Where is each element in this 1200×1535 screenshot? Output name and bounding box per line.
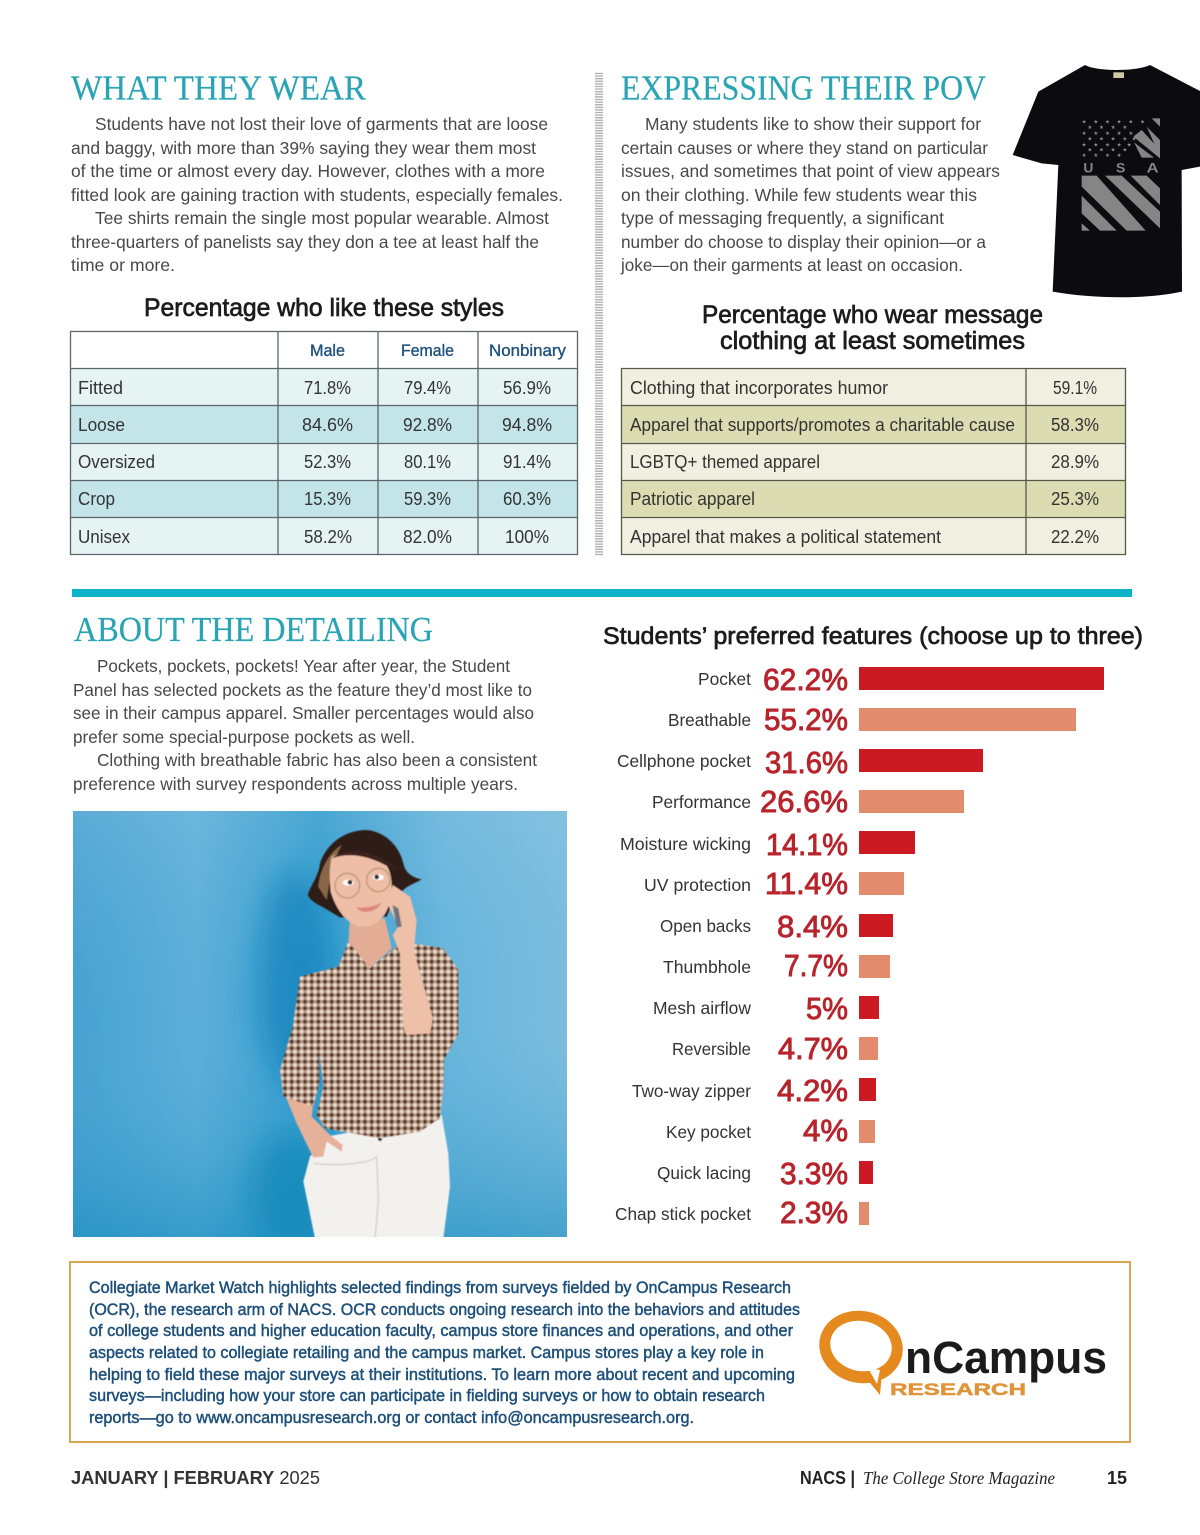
callout text: surveys—including how your store can participate in fielding surveys or how to obtain research — [89, 1387, 765, 1405]
icon: t-shirt with USA flag print: A — [1147, 159, 1159, 175]
chart row: two-way zipper: Two-way zipper — [632, 1081, 751, 1101]
text block: expressing their pov: Many students like to show their support for — [645, 114, 981, 134]
table: styles — [70, 331, 578, 555]
chart row: cellphone pocket: Cellphone pocket — [617, 751, 751, 771]
chart row: pocket: Pocket — [698, 669, 751, 689]
callout text: of college students and higher education faculty, campus store finances and operations, and other — [89, 1322, 793, 1340]
chart row: open backs: 8.4% — [777, 909, 848, 944]
chart row: moisture wicking: Moisture wicking — [620, 834, 751, 854]
chart row: reversible — [672, 1031, 878, 1066]
chart row: breathable: Breathable — [668, 710, 751, 730]
text block: expressing their pov: type of messaging frequently, a significant — [621, 208, 944, 228]
chart row: performance — [652, 784, 964, 819]
chart row: key pocket — [666, 1113, 875, 1148]
footer: publication name: NACS | — [800, 1468, 855, 1488]
icon: t-shirt with USA flag print: U — [1083, 159, 1093, 175]
chart row: breathable: 55.2% — [764, 702, 848, 737]
table: styles: Fitted — [78, 378, 123, 398]
text block: what they wear: and baggy, with more than 39% saying they wear them most — [71, 138, 536, 158]
text block: expressing their pov: number do choose to display their opinion—or a — [621, 232, 986, 252]
table: styles: 84.6% — [302, 415, 353, 435]
footer: issue date: JANUARY | FEBRUARY 2025 — [71, 1468, 320, 1488]
text block: what they wear: Tee shirts remain the single most popular wearable. Almost — [95, 208, 549, 228]
table: styles: Unisex — [78, 527, 130, 547]
icon: t-shirt with USA flag print: ★★★★ — [1087, 125, 1127, 131]
table: message clothing: 59.1% — [1053, 378, 1097, 398]
chart row: uv protection — [644, 866, 904, 901]
teal section rule — [72, 589, 1132, 597]
icon: t-shirt with USA flag print: ★★★★★ — [1082, 142, 1132, 148]
table: styles: Crop — [78, 489, 115, 509]
text block: what they wear: three-quarters of panelists say they don a tee at least half the — [71, 232, 539, 252]
table: message clothing: 28.9% — [1051, 452, 1099, 472]
table: message clothing: Apparel that supports/promotes a charitable cause — [630, 415, 1015, 435]
chart row: open backs: Open backs — [660, 916, 751, 936]
text block: what they wear — [71, 114, 563, 275]
chart row: mesh airflow: Mesh airflow — [653, 998, 751, 1018]
chart row: thumbhole: 7.7% — [784, 948, 848, 983]
face — [330, 852, 392, 927]
shirt body — [280, 942, 458, 1138]
table: styles: 100% — [505, 527, 549, 547]
callout text: helping to field these major surveys at their institutions. To learn more about recent and upcoming — [89, 1366, 795, 1384]
callout: about OnCampus Research — [70, 1262, 1130, 1442]
icon: t-shirt with USA flag print — [1013, 65, 1200, 297]
raised forearm and hand — [387, 885, 433, 1047]
icon: t-shirt with USA flag print: ★★★★★★ — [1082, 120, 1145, 126]
glasses — [335, 868, 390, 898]
icon: t-shirt with USA flag print: S — [1116, 159, 1125, 175]
text block: expressing their pov: on their clothing. While few students wear this — [621, 185, 977, 205]
text block: about the detailing: Panel has selected pockets as the feature they’d most like to — [73, 680, 532, 700]
heading: percentage who wear message clothing — [702, 301, 1043, 355]
chart row: chap stick pocket — [615, 1195, 869, 1230]
table: styles: 52.3% — [304, 452, 351, 472]
chart row: thumbhole: Thumbhole — [663, 957, 751, 977]
table: styles: 92.8% — [403, 415, 452, 435]
table: message clothing: LGBTQ+ themed apparel — [630, 452, 820, 472]
callout text: aspects related to collegiate retailing and the campus market. Campus stores play a key role in — [89, 1344, 764, 1362]
text block: what they wear: Students have not lost their love of garments that are loose — [95, 114, 548, 134]
chart row: reversible: Reversible — [672, 1039, 751, 1059]
chart row: uv protection: UV protection — [644, 875, 751, 895]
table: styles: Female — [401, 341, 454, 360]
text block: expressing their pov: issues, and sometimes that point of view appears — [621, 161, 1000, 181]
table: styles: 71.8% — [304, 378, 351, 398]
heading: percentage who wear message clothing: clothing at least sometimes — [720, 327, 1025, 355]
chart row: open backs — [660, 909, 893, 944]
table: message clothing: 25.3% — [1051, 489, 1099, 509]
chart row: two-way zipper: 4.2% — [777, 1073, 848, 1108]
table: styles: 80.1% — [404, 452, 451, 472]
chart row: quick lacing — [657, 1156, 873, 1191]
table: styles: 94.8% — [502, 415, 552, 435]
fringe — [332, 851, 396, 868]
chart: students' preferred features — [603, 623, 1143, 1230]
table: message clothing: 58.3% — [1051, 415, 1099, 435]
icon: t-shirt with USA flag print: ★★★★★ — [1087, 136, 1137, 142]
table: styles: Nonbinary — [489, 341, 566, 360]
chart row: cellphone pocket: 31.6% — [765, 745, 848, 780]
text block: expressing their pov — [620, 114, 1000, 275]
chart row: mesh airflow: 5% — [806, 991, 848, 1026]
table: message clothing: Patriotic apparel — [630, 489, 755, 509]
table: styles: 58.2% — [304, 527, 352, 547]
table: styles: 56.9% — [503, 378, 551, 398]
logo: OnCampus Research — [812, 1303, 1107, 1399]
table: message clothing — [622, 368, 1126, 555]
chart row: reversible: 4.7% — [778, 1031, 848, 1066]
chart row: breathable — [668, 702, 1076, 737]
photo: student on the phone — [73, 811, 567, 1250]
phone — [393, 905, 402, 927]
dotted column divider — [595, 72, 603, 556]
table: styles: Loose — [78, 415, 125, 435]
chart row: key pocket: Key pocket — [666, 1122, 751, 1142]
neck — [348, 918, 392, 968]
text block: expressing their pov: certain causes or where they stand on particular — [621, 138, 988, 158]
text block: what they wear: time or more. — [71, 255, 175, 275]
heading: percentage who wear message clothing: Percentage who wear message — [702, 301, 1043, 329]
heading: expressing their pov: EXPRESSING THEIR POV — [621, 70, 986, 108]
table: styles: 79.4% — [404, 378, 451, 398]
text block: what they wear: of the time or almost every day. However, clothes with a more — [71, 161, 545, 181]
chart row: pocket — [698, 662, 1104, 697]
chart row: performance: 26.6% — [760, 784, 848, 819]
chart row: chap stick pocket: 2.3% — [780, 1195, 848, 1230]
chart row: quick lacing: Quick lacing — [657, 1163, 751, 1183]
table: styles: 82.0% — [403, 527, 452, 547]
chart row: thumbhole — [663, 948, 890, 983]
icon: t-shirt with USA flag print: ★★★★ — [1082, 153, 1122, 159]
table: styles: Male — [310, 341, 345, 360]
callout text: (OCR), the research arm of NACS. OCR conducts ongoing research into the behaviors and attitudes — [89, 1301, 800, 1319]
table: message clothing: Apparel that makes a political statement — [630, 527, 941, 547]
callout text: Collegiate Market Watch highlights selected findings from surveys fielded by OnCampus Research — [89, 1279, 791, 1297]
heading: what they wear: WHAT THEY WEAR — [71, 70, 366, 108]
footer: page number: 15 — [1107, 1468, 1127, 1488]
chart row: quick lacing: 3.3% — [780, 1156, 848, 1191]
heading: percentage who like these styles: Percentage who like these styles — [144, 294, 504, 322]
table: message clothing: Clothing that incorporates humor — [630, 378, 888, 398]
callout text — [89, 1279, 800, 1427]
chart row: performance: Performance — [652, 792, 751, 812]
icon: t-shirt with USA flag print: ★★★★★ — [1082, 131, 1133, 137]
text block: expressing their pov: joke—on their garments at least on occasion. — [620, 255, 963, 275]
mouth — [356, 903, 381, 912]
table: styles: 59.3% — [404, 489, 451, 509]
table: styles: Oversized — [78, 452, 155, 472]
chart row: moisture wicking — [620, 827, 915, 862]
chart row: uv protection: 11.4% — [765, 866, 848, 901]
logo: OnCampus Research: RESEARCH — [890, 1380, 1026, 1399]
chart row: key pocket: 4% — [803, 1113, 848, 1148]
chart row: pocket: 62.2% — [763, 662, 848, 697]
table: styles: 15.3% — [304, 489, 351, 509]
table: styles: 60.3% — [503, 489, 551, 509]
chart row: cellphone pocket — [617, 745, 983, 780]
rolled sleeve — [406, 1018, 434, 1047]
eyes — [343, 880, 354, 886]
chart row: two-way zipper — [632, 1073, 876, 1108]
text block: about the detailing — [73, 656, 537, 794]
text block: what they wear: fitted look are gaining traction with students, especially females. — [71, 185, 563, 205]
text block: about the detailing: preference with survey respondents across multiple years. — [73, 774, 518, 794]
table: message clothing: 22.2% — [1051, 527, 1099, 547]
chart row: mesh airflow — [653, 991, 879, 1026]
table: styles: 91.4% — [503, 452, 551, 472]
footer: publication name: The College Store Magazine — [863, 1468, 1055, 1488]
hair — [308, 830, 422, 917]
forearm and hand in pocket — [285, 1095, 343, 1158]
text block: about the detailing: see in their campus apparel. Smaller percentages would also — [73, 703, 534, 723]
icon: t-shirt with USA flag print: ★★★★ — [1087, 148, 1127, 154]
text block: about the detailing: Clothing with breathable fabric has also been a consistent — [97, 750, 537, 770]
chart row: moisture wicking: 14.1% — [766, 827, 848, 862]
logo: OnCampus Research: nCampus — [905, 1332, 1107, 1383]
heading: about the detailing: ABOUT THE DETAILING — [74, 611, 433, 649]
trousers — [303, 1115, 450, 1238]
text block: about the detailing: Pockets, pockets, pockets! Year after year, the Student — [97, 656, 510, 676]
callout text: reports—go to www.oncampusresearch.org or contact info@oncampusresearch.org. — [89, 1409, 694, 1427]
chart title: Students’ preferred features (choose up to three) — [603, 623, 1143, 650]
chart row: chap stick pocket: Chap stick pocket — [615, 1204, 751, 1224]
text block: about the detailing: prefer some special-purpose pockets as well. — [73, 727, 415, 747]
